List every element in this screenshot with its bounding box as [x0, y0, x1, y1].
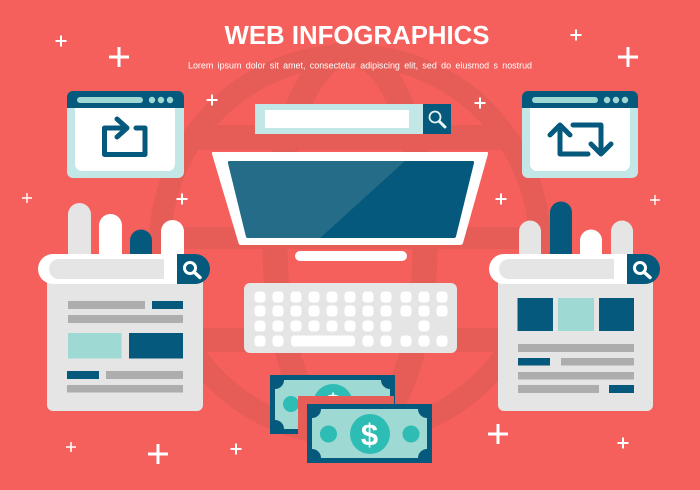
search field — [38, 254, 210, 284]
keyboard — [244, 283, 457, 353]
monitor stand — [295, 251, 407, 261]
icon: magnifier — [430, 112, 445, 127]
icon: repeat arrow — [104, 119, 145, 154]
subtitle: Lorem ipsum dolor sit amet, consectetur adipiscing elit, sed do eiusmod s nostrud — [188, 60, 532, 72]
content rows — [518, 298, 634, 393]
monitor — [212, 152, 488, 261]
title: WEB INFOGRAPHICS — [224, 20, 490, 50]
content rows — [67, 301, 183, 392]
background globe — [140, 53, 560, 437]
top search bar — [255, 104, 451, 134]
tabs — [68, 203, 184, 256]
front banknote — [307, 404, 432, 463]
back banknote: $ — [324, 387, 342, 422]
right browser window — [522, 91, 638, 178]
left web page card — [38, 203, 210, 411]
dollar sign: $ — [361, 417, 378, 452]
right web page card — [489, 202, 660, 411]
tabs — [519, 202, 633, 256]
banknote shadow — [298, 396, 394, 436]
back banknote — [270, 375, 395, 434]
search field — [489, 254, 660, 284]
icon: retweet arrows — [550, 125, 611, 154]
left browser window — [67, 91, 184, 178]
